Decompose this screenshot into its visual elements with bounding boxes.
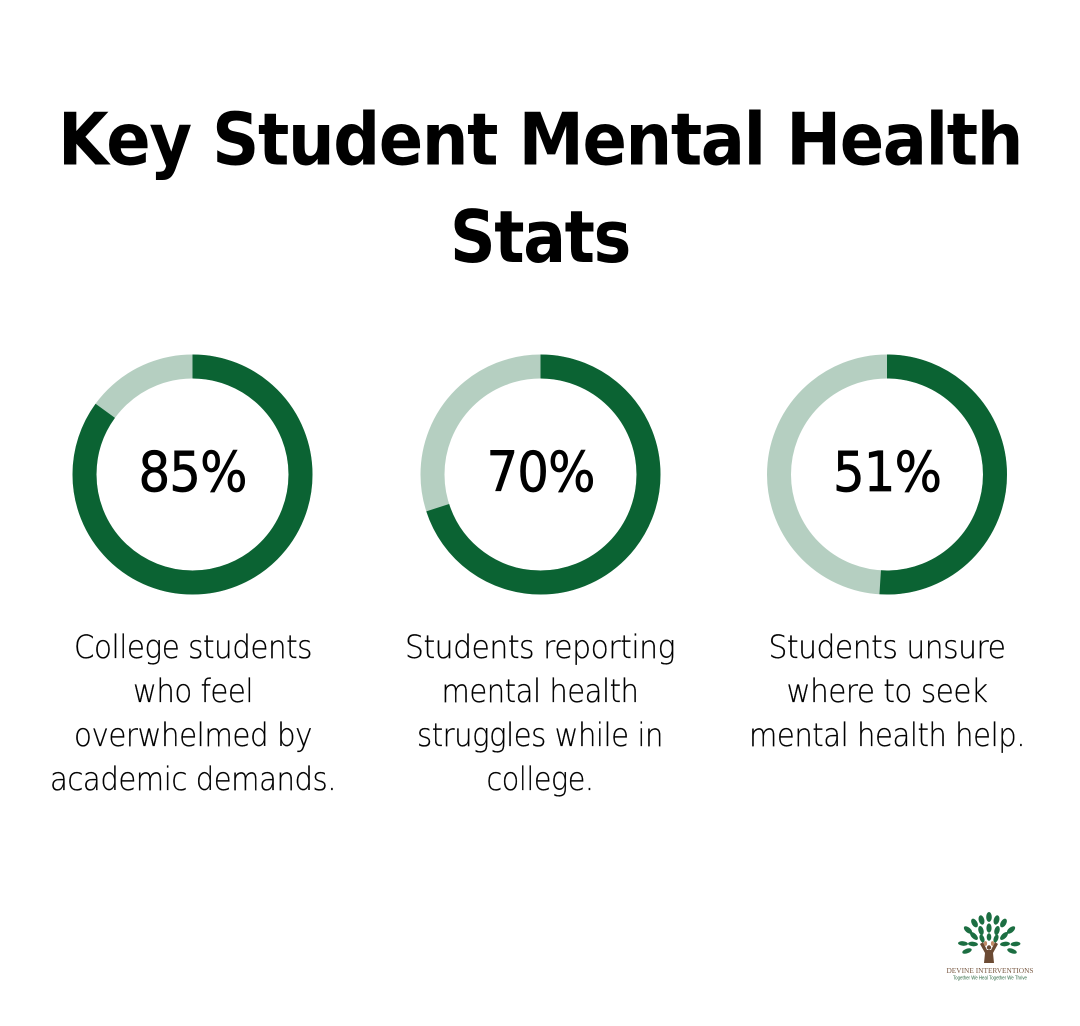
title — [58, 98, 1022, 279]
panel: 51% stat — [749, 366, 1025, 754]
donut chart: 70%: 70% — [486, 440, 594, 504]
description: 70%: college. — [486, 760, 594, 798]
description: 70%: mental health — [442, 672, 638, 710]
donut chart: 51% — [779, 366, 995, 582]
description: 51%: mental health help. — [749, 716, 1025, 754]
description: 85%: who feel — [133, 672, 253, 710]
description: 51% — [749, 628, 1025, 754]
logo: Devine Interventions — [946, 912, 1034, 982]
description: 70%: Students reporting — [405, 628, 675, 666]
donut chart: 51%: 51% — [833, 440, 941, 504]
description: 85% — [50, 628, 336, 798]
icon: tree — [958, 912, 1021, 963]
donut chart: 70% — [432, 366, 648, 582]
description: 70%: struggles while in — [417, 716, 663, 754]
description: 51%: where to seek — [786, 672, 988, 710]
donut chart: 85%: 85% — [138, 440, 246, 504]
description: 85%: overwhelmed by — [74, 716, 312, 754]
title: Stats — [450, 195, 630, 279]
description: 51%: Students unsure — [768, 628, 1006, 666]
donut chart: 85% — [84, 366, 300, 582]
description: 85%: College students — [74, 628, 312, 666]
description: 70% — [405, 628, 675, 798]
panel: 70% stat — [405, 366, 675, 798]
brand name: DEVINE INTERVENTIONS — [946, 966, 1034, 975]
panel: 85% stat — [50, 366, 336, 798]
tagline: Together We Heal Together We Thrive — [953, 976, 1027, 982]
description: 85%: academic demands. — [50, 760, 336, 798]
